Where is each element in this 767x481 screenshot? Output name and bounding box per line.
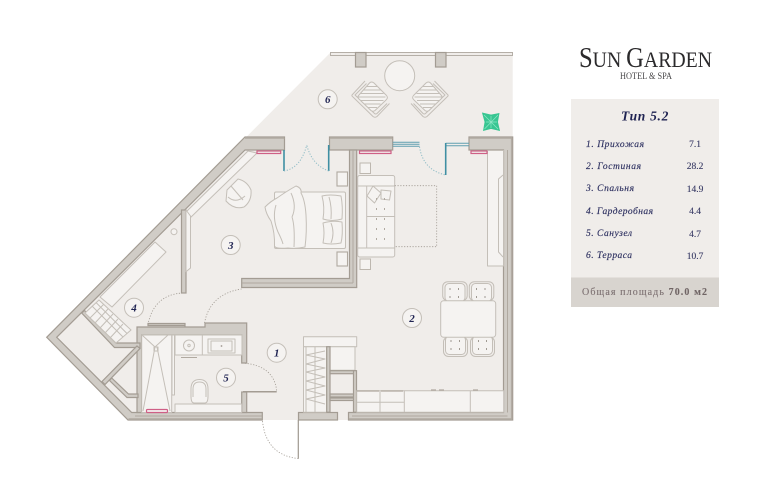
row 6: 6. Терраса <box>586 251 632 261</box>
row 6: 10.7 <box>687 252 704 262</box>
terrace railing <box>330 52 512 67</box>
row 5: 4.7 <box>689 230 701 240</box>
side table top <box>360 163 370 174</box>
rug outline <box>395 186 437 247</box>
green plant icon <box>482 113 500 130</box>
top and right wall <box>348 137 513 420</box>
bathroom walls <box>137 323 247 412</box>
logo <box>579 43 712 81</box>
row 1 <box>586 140 701 150</box>
entrance door <box>262 420 299 459</box>
room number 6: 6 <box>325 94 331 106</box>
tv unit <box>488 150 504 266</box>
wardrobe door swing <box>148 293 182 322</box>
row 4: 4.4 <box>689 207 701 217</box>
floor plan <box>47 52 513 459</box>
row 1: 7.1 <box>689 140 701 150</box>
room number 5 <box>216 368 236 387</box>
info panel <box>571 99 719 307</box>
bathroom vanity <box>175 335 242 358</box>
teal window and door <box>393 142 469 175</box>
shower <box>142 335 172 412</box>
row 2: 28.2 <box>687 162 704 172</box>
bathroom partition strip <box>172 335 174 395</box>
room number 3: 3 <box>227 240 234 252</box>
row 3 <box>585 184 704 195</box>
bedside table bottom <box>337 252 348 266</box>
toilet <box>191 380 208 403</box>
row 5: 5. Санузел <box>586 229 632 239</box>
top wall centre <box>330 137 393 150</box>
entrance wall stub <box>298 412 338 420</box>
logo wordmark: SUN GARDEN <box>579 43 712 74</box>
utility partition walls <box>82 310 140 348</box>
room number 3 <box>221 236 240 254</box>
floor area <box>47 53 513 420</box>
row 2: 2. Гостиная <box>586 162 641 172</box>
small round column <box>171 229 177 235</box>
teal double door <box>284 145 329 171</box>
closet walls <box>327 347 356 412</box>
sofa <box>358 176 395 257</box>
row 3: 14.9 <box>687 185 704 195</box>
storage shelf <box>100 242 166 307</box>
room number 5: 5 <box>223 372 229 384</box>
bedroom door swing <box>204 289 242 323</box>
room number 2 <box>402 308 422 328</box>
row 5 <box>586 229 701 240</box>
room number 4 <box>124 298 144 317</box>
terrace chair left <box>352 81 390 117</box>
room number 4: 4 <box>130 302 137 314</box>
row 4: 4. Гардеробная <box>586 206 653 217</box>
bedroom bed <box>265 186 346 248</box>
row 3: 3. Спальня <box>585 184 634 194</box>
pink radiators <box>257 151 487 154</box>
row 2 <box>586 162 704 172</box>
hallway closet <box>304 337 357 412</box>
wardrobe rack <box>85 300 131 343</box>
bedroom desk <box>186 151 257 219</box>
room number 2: 2 <box>408 313 415 325</box>
row 4 <box>586 206 701 217</box>
row 6 <box>586 251 704 262</box>
room number 6 <box>318 90 337 109</box>
wardrobe partition <box>182 210 186 293</box>
panel title: Тип 5.2 <box>621 108 669 124</box>
total band: Общая площадь 70.0 м2 <box>582 287 707 298</box>
terrace chair right <box>411 81 448 117</box>
bedside table top <box>337 172 348 186</box>
side table bottom <box>360 259 370 270</box>
shaft lower wall <box>110 378 138 398</box>
terrace round table <box>385 61 415 91</box>
kitchen counter <box>357 390 504 412</box>
shaft diagonal wall <box>102 346 140 384</box>
panel background <box>571 99 719 307</box>
room number 1 <box>267 343 286 362</box>
total band <box>571 278 719 307</box>
shower pink marker <box>146 410 168 412</box>
dining table set <box>441 282 496 356</box>
bedroom and living partition <box>242 150 357 288</box>
room number 1: 1 <box>274 348 279 360</box>
row 1: 1. Прихожая <box>586 140 644 150</box>
bedroom wardrobe panel <box>186 210 190 272</box>
bathroom wall lower <box>242 392 247 412</box>
bedroom armchair <box>226 179 251 208</box>
bathroom bench <box>175 404 242 412</box>
outer wall: diagonal, left and bottom <box>47 137 285 420</box>
bathroom door <box>242 363 277 392</box>
logo tagline: HOTEL & SPA <box>620 71 672 81</box>
